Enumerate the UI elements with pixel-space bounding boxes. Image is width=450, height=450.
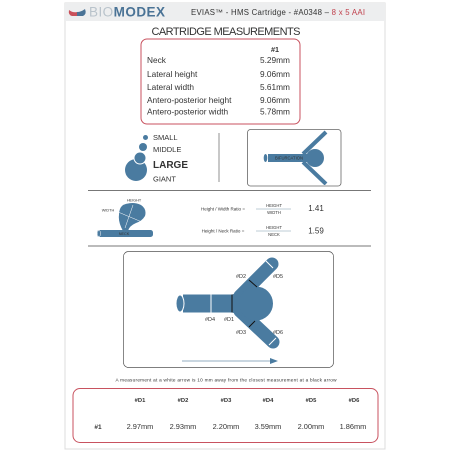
label: middle: MIDDLE	[153, 145, 181, 154]
table column header: #1	[271, 45, 279, 54]
row: antero-posterior width: 5.78mm	[260, 106, 290, 116]
table header row: #D5	[306, 398, 317, 404]
ratio: height to width: HEIGHT	[266, 203, 282, 208]
table value row: 2.20mm	[213, 422, 239, 431]
logo wordmark: BIOMODEX	[89, 5, 165, 20]
heading: cartridge measurements: CARTRIDGE MEASUREMENTS	[152, 26, 300, 38]
row: neck	[147, 55, 290, 65]
arrow: flow direction	[182, 358, 278, 364]
ratio: height to neck	[202, 225, 324, 237]
icon: logo mark	[69, 9, 86, 16]
label: D1: #D1	[224, 317, 234, 323]
label: D6: #D6	[273, 330, 283, 336]
row: antero-posterior height: Antero-posterior height	[147, 95, 232, 105]
table header row: #D2	[178, 398, 188, 404]
header title: EVIAS™ - HMS Cartridge - #A0348 – 8 x 5 AAI	[191, 8, 365, 17]
label: D5: #D5	[273, 274, 283, 280]
row: lateral width: Lateral width	[147, 82, 194, 92]
row: antero-posterior width	[147, 106, 290, 116]
label: D4: #D4	[205, 317, 215, 323]
table value row: 2.00mm	[298, 422, 324, 431]
value: height neck ratio: 1.59	[308, 226, 324, 236]
label: neck: NECK	[119, 232, 130, 236]
panel: diameter measurements table	[73, 388, 378, 442]
table header row: #D4	[263, 398, 274, 404]
label: large: LARGE	[153, 160, 188, 171]
label: D2: #D2	[236, 274, 246, 280]
caption: A measurement at a white arrow is 10 mm away from the closest measurement at a black arrow	[116, 378, 337, 382]
ratio: height to neck: NECK	[268, 232, 280, 237]
table header row: #D1	[135, 398, 146, 404]
ratio: height to width: Height / Width Ratio =	[201, 206, 245, 212]
value: height width ratio: 1.41	[308, 204, 324, 213]
panel: cartridge measurements table	[141, 39, 300, 124]
label: width: WIDTH	[102, 208, 114, 212]
row: neck: Neck	[147, 55, 167, 65]
table value row: 2.93mm	[170, 422, 196, 431]
table header row: #D3	[221, 398, 232, 404]
row: antero-posterior height	[147, 95, 290, 105]
panel: bifurcation diagram	[248, 130, 341, 186]
row: neck: 5.29mm	[260, 55, 290, 65]
label: height: HEIGHT	[127, 198, 142, 202]
row: lateral width	[147, 82, 290, 92]
vessel shape	[176, 261, 276, 345]
header bar	[65, 3, 385, 21]
ratio: height to neck: HEIGHT	[266, 225, 282, 230]
table value row	[94, 422, 366, 431]
row: antero-posterior width: Antero-posterior width	[147, 106, 229, 116]
table header row: #D6	[349, 398, 360, 404]
table header row	[135, 398, 360, 404]
row: antero-posterior height: 9.06mm	[260, 95, 290, 105]
size scale icon and labels	[125, 133, 188, 184]
table value row: #1	[94, 424, 102, 431]
label: giant: GIANT	[153, 174, 176, 184]
label: D3: #D3	[236, 330, 246, 336]
row: lateral width: 5.61mm	[260, 82, 290, 92]
row: lateral height: 9.06mm	[260, 69, 290, 79]
row: lateral height	[147, 69, 290, 79]
aneurysm dimensions diagram	[97, 198, 153, 237]
ratio: height to width: WIDTH	[267, 210, 281, 215]
table value row: 3.59mm	[255, 422, 281, 431]
row: lateral height: Lateral height	[147, 69, 198, 79]
ratio: height to width	[201, 203, 324, 215]
table value row: 2.97mm	[127, 422, 153, 431]
table value row: 1.86mm	[340, 422, 366, 431]
label: small: SMALL	[153, 133, 178, 142]
label: bifurcation: BIFURCATION	[275, 156, 303, 160]
panel: vessel measurement diagram	[124, 252, 334, 368]
ratio: height to neck: Height / Neck Ratio =	[202, 228, 245, 234]
